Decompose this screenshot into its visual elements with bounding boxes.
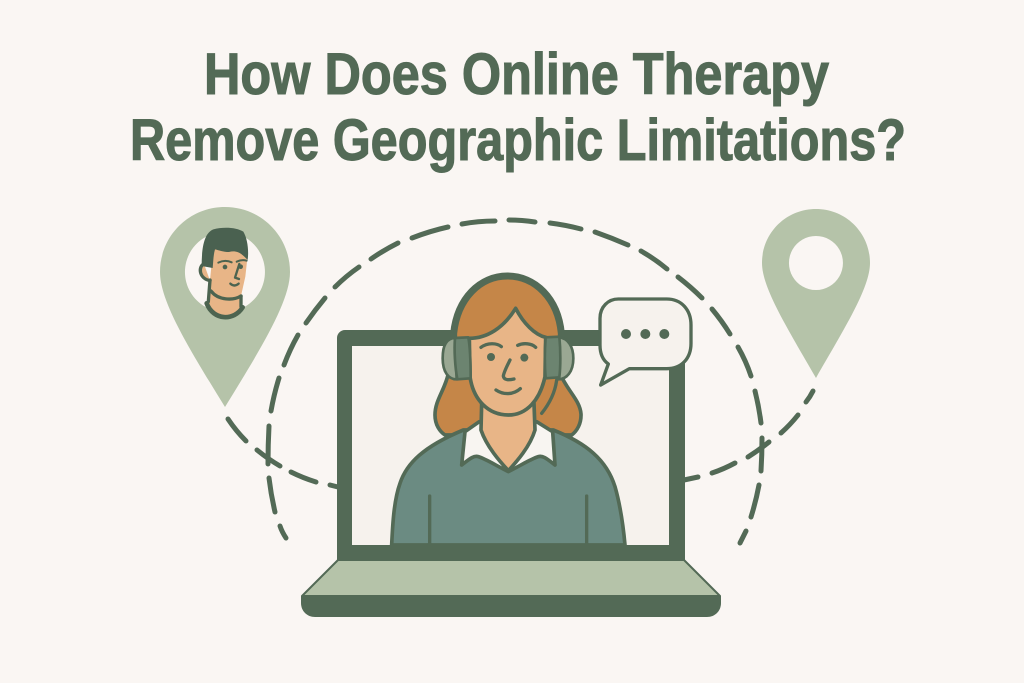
icon: man portrait in pin bbox=[200, 228, 248, 317]
collar bbox=[462, 422, 555, 472]
icon: left location pin bbox=[160, 207, 290, 407]
title: How Does Online Therapy bbox=[204, 42, 829, 107]
laptop base bbox=[301, 560, 721, 617]
neck bbox=[481, 403, 535, 471]
face bbox=[469, 308, 546, 415]
hair back bbox=[435, 373, 581, 435]
dashed connection left pin to laptop bbox=[228, 419, 338, 487]
title bbox=[130, 42, 906, 173]
dashed circular arc bbox=[268, 220, 762, 543]
left headphone bbox=[443, 338, 457, 379]
microphone arm bbox=[542, 380, 557, 413]
speech bubble bbox=[600, 299, 691, 385]
icon: right location pin bbox=[762, 209, 870, 378]
right headphone bbox=[558, 337, 573, 379]
headband and hair top bbox=[454, 276, 561, 373]
therapist with headset bbox=[392, 276, 625, 545]
dashed connection right pin to laptop bbox=[684, 391, 813, 480]
laptop bottom bezel bbox=[337, 545, 685, 560]
laptop screen bbox=[337, 330, 685, 560]
sweater bbox=[392, 430, 625, 545]
